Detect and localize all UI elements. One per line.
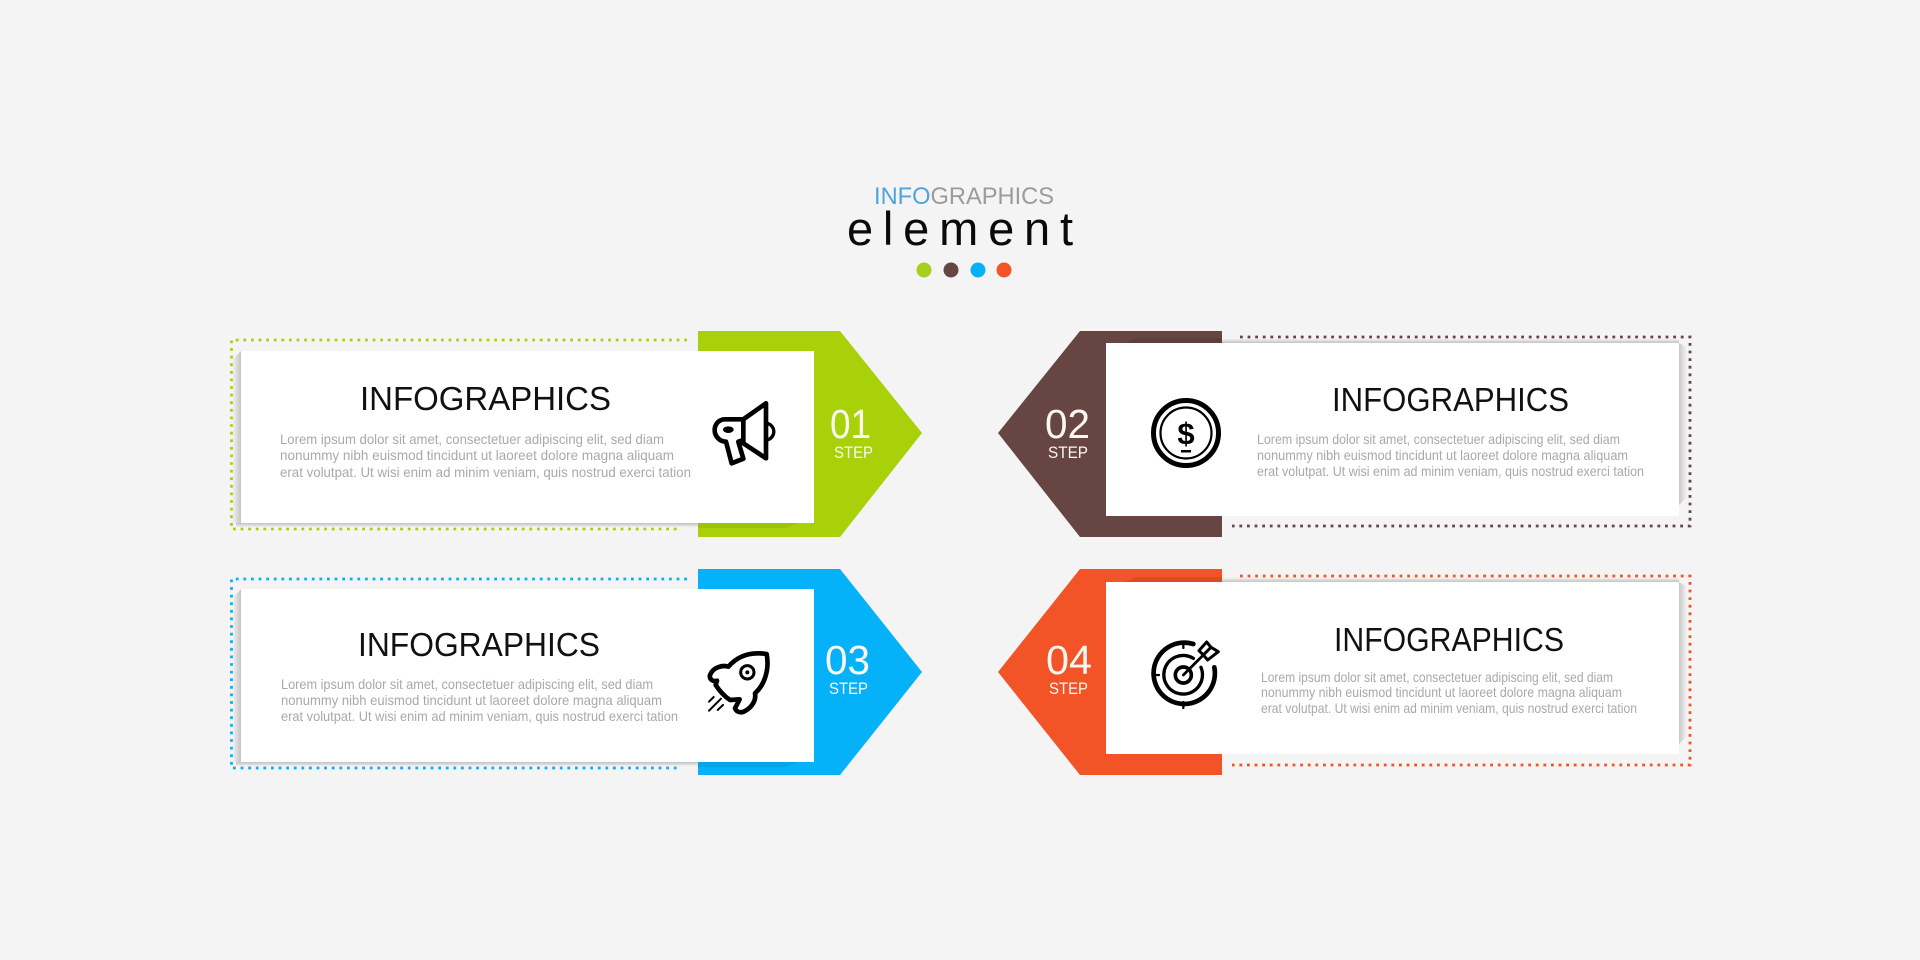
step label: STEP (829, 679, 868, 698)
card shadow (1125, 338, 1686, 505)
arrow (698, 331, 922, 537)
step label: STEP (1048, 443, 1088, 462)
panel: step 04 (998, 569, 1690, 775)
body text: nonummy nibh euismod tincidunt ut laoreet dolore magna aliquam (1257, 447, 1628, 463)
panel: step 01 (232, 331, 922, 537)
dotted frame (232, 340, 687, 529)
body text: Lorem ipsum dolor sit amet, consectetuer adipiscing elit, sed diam (1261, 669, 1613, 685)
body text: nonummy nibh euismod tincidunt ut laoreet dolore magna aliquam (281, 692, 662, 708)
body text: erat volutpat. Ut wisi enim ad minim veniam, quis nostrud exerci tation (1261, 700, 1637, 716)
icon: megaphone (715, 403, 774, 463)
body text (280, 431, 691, 480)
body text: Lorem ipsum dolor sit amet, consectetuer adipiscing elit, sed diam (281, 676, 653, 692)
body text: Lorem ipsum dolor sit amet, consectetuer adipiscing elit, sed diam (1257, 431, 1620, 447)
body text: Lorem ipsum dolor sit amet, consectetuer adipiscing elit, sed diam (280, 431, 664, 447)
step number: 01 (830, 401, 871, 447)
step number: 04 (1046, 637, 1092, 683)
icon: dollar coin (1154, 400, 1218, 466)
white card (1106, 582, 1679, 754)
header (847, 183, 1073, 278)
heading: infographics: INFOGRAPHICS (874, 183, 1054, 210)
card title: INFOGRAPHICS (1332, 381, 1569, 418)
step number: 03 (825, 637, 870, 683)
body text: erat volutpat. Ut wisi enim ad minim veniam, quis nostrud exerci tation (281, 708, 678, 724)
icon: rocket (709, 653, 767, 712)
dotted frame (232, 579, 687, 768)
card shadow (1125, 577, 1686, 744)
step label: STEP (1049, 679, 1088, 698)
heading: element: element (847, 202, 1073, 255)
icon: target with arrow (1153, 642, 1218, 708)
arrow (998, 331, 1222, 537)
card title: INFOGRAPHICS (360, 380, 611, 417)
body text: nonummy nibh euismod tincidunt ut laoreet dolore magna aliquam (280, 447, 674, 463)
body text: erat volutpat. Ut wisi enim ad minim veniam, quis nostrud exerci tation (1257, 463, 1644, 479)
white card (1106, 343, 1679, 516)
arrow (698, 569, 922, 775)
icon: dollar coin: $ (1177, 416, 1195, 451)
white card (241, 589, 814, 762)
white card (241, 351, 814, 523)
card title: INFOGRAPHICS (358, 626, 600, 663)
step label: STEP (834, 443, 873, 462)
card title: INFOGRAPHICS (1334, 621, 1564, 658)
card shadow (233, 351, 798, 528)
panel: step 03 (232, 569, 922, 775)
arrow (998, 569, 1222, 775)
body text (281, 676, 678, 724)
colour dots (916, 262, 1012, 278)
card shadow (233, 589, 798, 767)
body text: nonummy nibh euismod tincidunt ut laoreet dolore magna aliquam (1261, 684, 1622, 700)
dotted frame (1232, 337, 1690, 526)
step number: 02 (1045, 401, 1090, 447)
dotted frame (1232, 576, 1690, 765)
body text: erat volutpat. Ut wisi enim ad minim veniam, quis nostrud exerci tation (280, 464, 691, 480)
body text (1257, 431, 1644, 479)
body text (1261, 669, 1637, 716)
panel: step 02 (998, 331, 1690, 537)
